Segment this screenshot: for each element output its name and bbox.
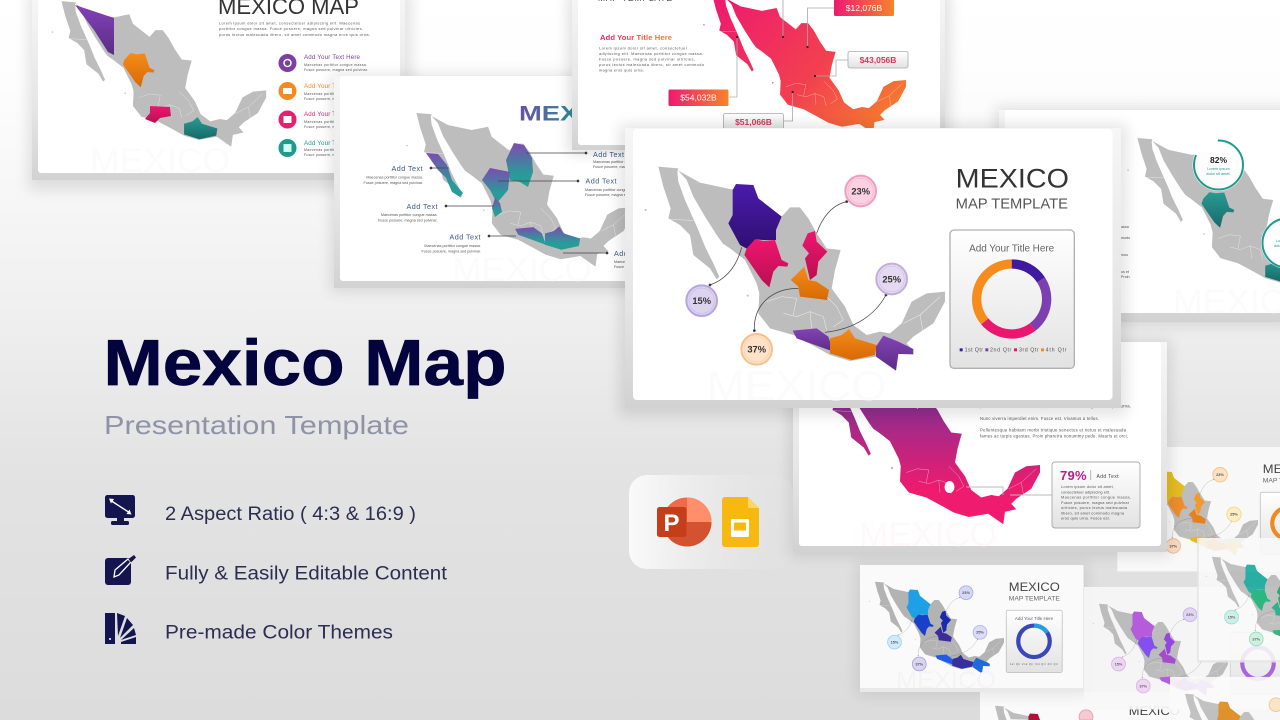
icon list: Maecenas porttitor congue massa. (304, 63, 367, 67)
right labels: Add Text (586, 176, 616, 186)
right labels: Maecenas porttitor congue massa. (614, 260, 671, 264)
side text fragments (1121, 225, 1130, 279)
left labels: Fusce posuere, magna sed pulvinar. (364, 181, 423, 185)
badge: 25%: 25% (882, 274, 902, 284)
side heading: Add Your Title Here (600, 33, 672, 42)
value box: $12,076B: $12,076B (846, 3, 883, 13)
callout: Maecenas porttitor congue massa. (1061, 494, 1131, 500)
badges (888, 586, 987, 671)
intro text: porttitor congue massa. Fusce posuere, magna sed pulvinar ultricies, (219, 26, 363, 31)
panel: app icons (629, 475, 793, 569)
right labels (585, 150, 673, 269)
value box: $43,056B: $43,056B (860, 55, 896, 65)
slide: yellow theme (1117, 447, 1280, 571)
callout: Fusce posuere, magna sed pulvinar (1061, 500, 1130, 505)
callout: consectetuer adipiscing elit. (1061, 490, 1110, 494)
icon list: Fusce posuere, magna sed pulvinar. (304, 153, 368, 157)
text block: Pellentesque habitant morbi tristique senectus et netus et malesuada (980, 428, 1127, 432)
chart panel: 1st Qtr 2nd Qtr 3rd Qtr 4th Qtr (1010, 663, 1058, 666)
subtitle: MAP TEMPLATE (956, 195, 1068, 212)
slide: green theme (1197, 538, 1280, 662)
highlighted state: Michoacan (145, 106, 171, 123)
donut chart (977, 264, 1047, 334)
chart panel: Add Your Title Here (1015, 616, 1054, 621)
map (406, 113, 632, 267)
icon: Google Slides (722, 497, 759, 547)
legend (960, 348, 1067, 354)
left labels: Maecenas porttitor congue massa. (424, 244, 481, 248)
legend: 1st Qtr (965, 348, 983, 354)
side text: purus lectus malesuada libero, sit amet commodo (599, 62, 704, 67)
side text: adipiscing elit. Maecenas porttitor congue massa. (599, 51, 703, 56)
icon: PowerPoint (657, 498, 712, 546)
feature: editable (105, 555, 448, 585)
slide: blue theme (856, 563, 1088, 696)
progress: 82%: 82% (1210, 155, 1227, 165)
progress: 82%: Lorem ipsum (1207, 166, 1230, 171)
feature: color themes (105, 613, 393, 644)
side text fragments: modo (1121, 236, 1130, 240)
icon list (278, 54, 368, 157)
progress: second circle (1261, 217, 1280, 269)
location marker (944, 481, 954, 493)
left labels: Add Text (406, 202, 438, 211)
intro text: purus lectus malesuada libero, sit amet commodo magna eros quis urna. (219, 32, 370, 37)
badges: 37% (915, 661, 924, 666)
icon list: Add Your Text Here (304, 54, 361, 61)
left labels: Maecenas porttitor congue massa. (381, 213, 438, 217)
badge: 15%: 15% (692, 296, 712, 306)
connector (966, 487, 1052, 495)
slide: green theme: 37% (1252, 636, 1261, 641)
intro text (219, 20, 370, 37)
highlighted state: Sonora (75, 5, 114, 55)
map (52, 1, 266, 147)
slide: purple theme: 15% (1115, 661, 1123, 666)
legend: 3rd Qtr (1019, 348, 1039, 354)
value box: $51,066B (724, 114, 784, 130)
text block: purus lectus malesuada libero, sit amet commodo magna eros quis urna. (980, 404, 1131, 408)
callout: eros quis urna. Fusce est. (1061, 516, 1110, 520)
map (645, 167, 945, 371)
chart panel (1006, 610, 1062, 672)
icon list: Fusce posuere, magna sed pulvinar. (304, 97, 368, 101)
map (703, 0, 906, 133)
callout: 79% (1060, 468, 1087, 483)
left labels: Fusce posuere, magna sed pulvinar. (422, 250, 481, 254)
slide: purple theme (1084, 587, 1280, 710)
value box: $54,032B: $54,032B (680, 92, 717, 102)
badge: 15% (686, 285, 717, 316)
side text: Fusce posuere, magna sed pulvinar ultricies, (599, 56, 695, 62)
icon list: Add Your Text Here (304, 83, 361, 90)
icon list: Add Your Text Here (304, 111, 361, 118)
badge: 25% (876, 264, 907, 294)
icon list: Fusce posuere, magna sed pulvinar. (304, 68, 368, 72)
slide: purple theme: 37% (1139, 683, 1148, 688)
slide: purple theme: 23% (1186, 612, 1194, 617)
callout: libero, sit amet commodo magna (1061, 510, 1125, 516)
icon: monitor (105, 495, 135, 525)
side text: magna eros quis urna. (599, 68, 644, 72)
legend: 4th Qtr (1046, 348, 1067, 354)
progress: 82%: dolor sit amet. (1206, 171, 1231, 176)
feature: editable: Fully & Easily Editable Content (165, 564, 448, 584)
badge: 37% (741, 334, 772, 365)
slide: callout lines map (330, 74, 710, 292)
slide: main donut map (619, 124, 1127, 416)
slide: right map with progress circles (995, 106, 1280, 326)
badge: 23%: 23% (851, 186, 871, 196)
feature: aspect ratio (105, 495, 416, 525)
subheading: Presentation Template (104, 410, 409, 440)
feature: aspect ratio: 2 Aspect Ratio ( 4:3 & 16:9 ) (165, 504, 416, 525)
text block (980, 404, 1131, 438)
slide: financial values map (568, 0, 950, 154)
chart panel (950, 230, 1074, 368)
slide: yellow theme: 25% (1230, 512, 1238, 517)
right labels: Add Text (614, 249, 645, 258)
callout (1052, 462, 1140, 528)
left labels: Maecenas porttitor congue massa. (366, 176, 423, 180)
side text fragments: us et (1121, 270, 1129, 274)
slide: magenta theme map with callout (789, 340, 1171, 556)
side text fragments: mus (1121, 253, 1128, 257)
icon list: Fusce posuere, magna sed pulvinar. (304, 125, 368, 129)
slide: yellow theme: 23% (1216, 472, 1224, 477)
title: MEXICO (1009, 581, 1060, 594)
chart title: Add Your Title Here (969, 244, 1055, 255)
left labels: Add Text (450, 232, 480, 242)
intro text: Lorem ipsum dolor sit amet, consectetuer adipiscing elit. Maecenas (219, 20, 360, 26)
value box: $51,066B: $51,066B (735, 117, 772, 127)
map (869, 582, 1004, 674)
side text: Lorem ipsum dolor sit amet, consectetuer (599, 46, 688, 50)
icon list: Add Your Text Here (304, 140, 361, 147)
icon: edit (105, 555, 136, 585)
connectors (709, 201, 887, 332)
slide: blue theme: MAP TEMPLATE (1009, 595, 1060, 602)
headline: Mexico Map (104, 326, 506, 399)
watermark: MEXICO (859, 516, 997, 554)
callout: Add Text (1096, 474, 1119, 480)
badges: 25% (976, 630, 984, 635)
right labels: Fusce posuere, magna sed pulvinar. (585, 193, 644, 197)
badges: 15% (891, 639, 899, 644)
title: MEXICO (956, 163, 1069, 193)
badge: 37%: 37% (747, 345, 767, 355)
left labels: Add Text (392, 164, 422, 173)
callout: Lorem ipsum dolor sit amet, (1061, 484, 1114, 489)
watermark: MEXICO (90, 142, 230, 180)
icon list: Maecenas porttitor congue massa. (304, 120, 367, 124)
value box: $12,076B (834, 0, 894, 16)
slide: orange theme (1170, 677, 1280, 720)
feature: color themes: Pre-made Color Themes (165, 622, 393, 644)
slide: yellow theme: 37% (1169, 543, 1178, 548)
side text (599, 46, 704, 72)
callout: ultricies, purus lectus malesuada (1061, 505, 1128, 510)
side text fragments: Proin (1121, 275, 1130, 279)
text block: fames ac turpis egestas. Proin pharetra nonummy pede. Mauris et orci. (980, 434, 1128, 438)
right labels: Maecenas porttitor congue massa. (593, 160, 650, 164)
text block: Nunc viverra imperdiet enim. Fusce est. Vivamus a tellus. (980, 416, 1099, 421)
side text fragments: assa (1121, 225, 1130, 229)
badge: 23% (845, 176, 876, 206)
slide: green theme: 15% (1228, 614, 1236, 619)
slide: top-left map with icon list (28, 0, 412, 190)
right labels: Fusce posuere, magna sed pulvinar. (593, 165, 652, 169)
right labels: Maecenas porttitor congue massa. (585, 188, 642, 192)
connector lines (430, 152, 608, 254)
slide: red theme: MEXICO (1129, 705, 1180, 718)
watermark: MEXICO (452, 251, 592, 289)
slide: red theme (980, 692, 1205, 720)
heading: MEXICO (519, 102, 627, 126)
icon: color fan (105, 613, 136, 644)
icon list: Maecenas porttitor congue massa. (304, 92, 367, 96)
right labels: Fusce posuere, magna sed pulvinar. (614, 265, 673, 269)
badges: 23% (962, 590, 970, 595)
left labels: Fusce posuere, magna sed pulvinar. (378, 218, 438, 222)
highlighted states (426, 143, 533, 217)
icon: PowerPoint: P (663, 510, 680, 537)
legend: 2nd Qtr (990, 348, 1012, 354)
left labels (364, 164, 481, 254)
connectors (729, 0, 848, 121)
map (815, 371, 1040, 524)
watermark: MEXICO (896, 667, 996, 694)
progress: 82% (1192, 139, 1244, 191)
watermark: MEXICO (707, 362, 887, 409)
right labels: Add Text (593, 150, 624, 159)
value box: $43,056B (848, 52, 908, 68)
value box: $54,032B (668, 90, 728, 106)
icon list: Maecenas porttitor congue massa. (304, 148, 367, 152)
map (1127, 138, 1280, 290)
